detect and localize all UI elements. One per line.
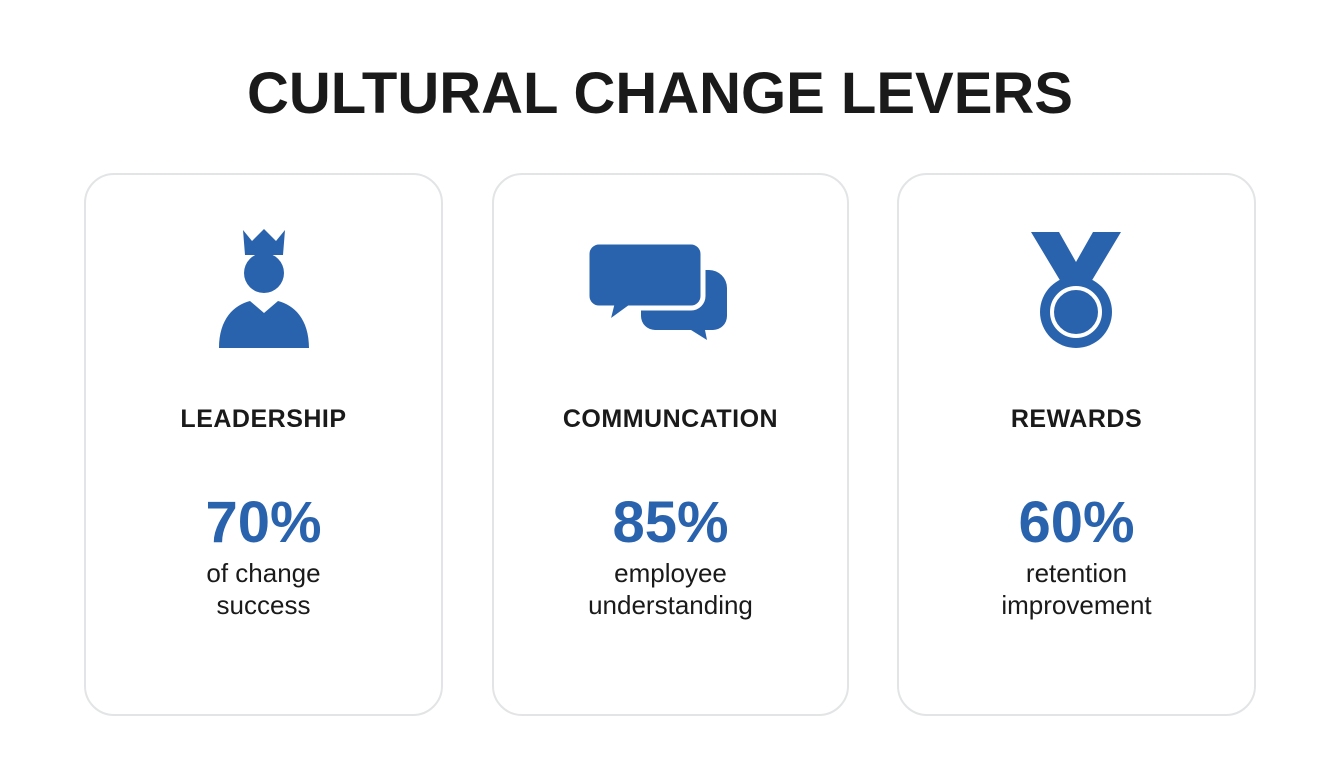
description: [206, 558, 321, 620]
description: [1001, 558, 1152, 620]
label: COMMUNCATION: [563, 405, 778, 433]
description: success: [217, 590, 310, 620]
icon: chat bubbles: [590, 244, 727, 340]
description: understanding: [588, 590, 753, 620]
panel: communication: [492, 173, 849, 716]
stat: 60%: [1018, 490, 1135, 555]
description: of change: [206, 558, 321, 588]
title: CULTURAL CHANGE LEVERS: [247, 61, 1073, 126]
label: LEADERSHIP: [180, 405, 347, 433]
icon: leader with crown: [219, 229, 309, 348]
stat: 70%: [205, 490, 322, 555]
label: REWARDS: [1011, 405, 1142, 433]
description: [588, 558, 753, 620]
description: improvement: [1001, 590, 1152, 620]
panel: rewards: [897, 173, 1256, 716]
panel: leadership: [84, 173, 443, 716]
stat: 85%: [612, 490, 729, 555]
icon: medal: [1031, 232, 1121, 348]
description: retention: [1026, 558, 1127, 588]
description: employee: [614, 558, 727, 588]
